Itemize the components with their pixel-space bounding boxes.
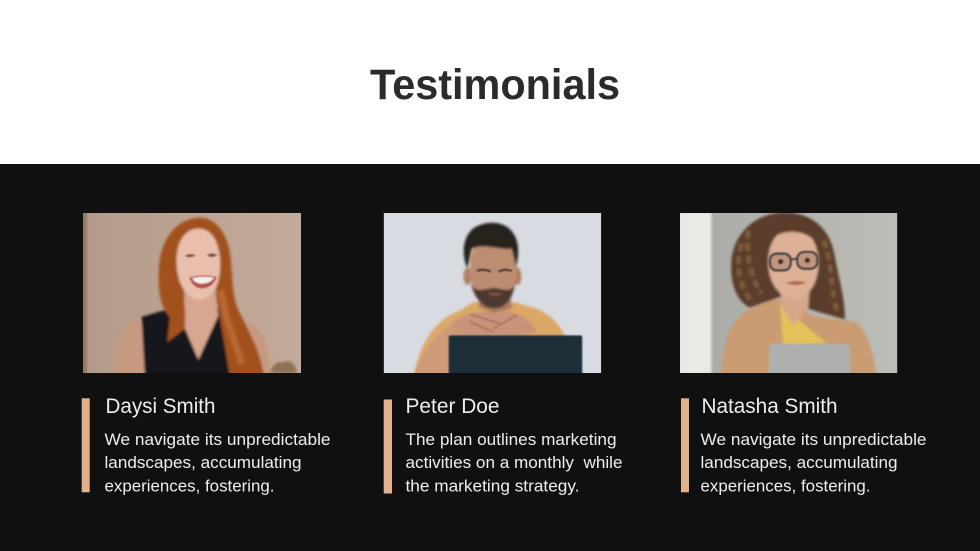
testimonial text: the marketing strategy.: [406, 476, 580, 496]
testimonial text: We navigate its unpredictable: [104, 430, 330, 449]
accent bar: [82, 398, 90, 492]
panel: Daysi Smith testimonial: [82, 212, 331, 495]
panel: Peter Doe testimonial: [384, 213, 622, 496]
testimonial text: [406, 430, 622, 496]
name: Peter Doe: [406, 395, 500, 418]
panel: Natasha Smith testimonial: [679, 212, 926, 495]
photo: smiling woman with long red hair: [83, 213, 301, 373]
testimonial text: [700, 430, 926, 496]
testimonial text: activities on a monthly while: [406, 453, 622, 472]
testimonial text: [104, 430, 330, 496]
testimonial text: We navigate its unpredictable: [700, 430, 926, 449]
name: Daysi Smith: [106, 395, 216, 418]
accent bar: [681, 398, 689, 492]
photo: man with laptop, hands clasped: [384, 213, 602, 373]
name: Natasha Smith: [702, 395, 838, 418]
photo: woman with curly hair and glasses holding laptop: [680, 213, 898, 373]
testimonial text: landscapes, accumulating: [700, 453, 898, 472]
testimonial text: The plan outlines marketing: [406, 430, 616, 449]
testimonial text: experiences, fostering.: [700, 476, 870, 496]
title: Testimonials: [370, 61, 620, 109]
testimonial text: experiences, fostering.: [104, 476, 274, 496]
testimonial text: landscapes, accumulating: [104, 453, 302, 472]
accent bar: [384, 400, 392, 494]
